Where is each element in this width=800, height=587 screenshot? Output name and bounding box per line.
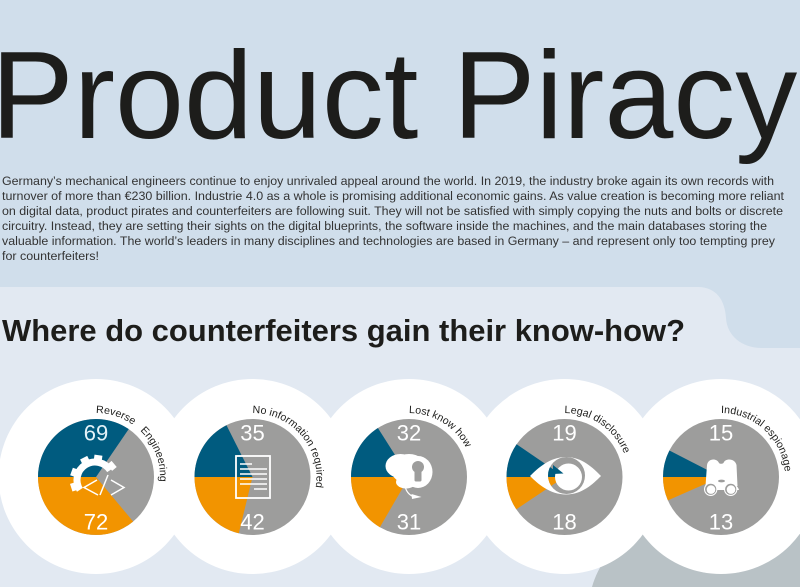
pie: industrial espionage: 15 xyxy=(709,420,733,446)
intro text: for counterfeiters! xyxy=(2,249,99,263)
pie: lost know how xyxy=(351,406,471,535)
intro text: Germany’s mechanical engineers continue to enjoy unrivaled appeal around the world. In 2019, the industry broke again its own records with xyxy=(2,174,774,188)
icon: eye xyxy=(530,457,601,494)
icon: binoculars xyxy=(704,459,739,496)
intro text: valuable information. The world’s leaders in many disciplines and technologies are based in Germany – and represent only too tempting prey xyxy=(2,234,776,248)
pie: reverse engineering: 69 xyxy=(84,420,108,446)
pie: legal disclosure: 18 xyxy=(552,510,577,534)
pie: no information required: 35 xyxy=(240,420,265,446)
intro text: turnover of more than €230 billion. Industrie 4.0 as a whole is promising additional economic gains. As value creation is becoming more reliant xyxy=(2,189,785,203)
white circles xyxy=(0,379,800,574)
intro text: on digital data, product pirates and counterfeiters are following suit. They will not be satisfied with simply copying the nuts and bolts or discrete xyxy=(2,204,783,218)
pie: legal disclosure: 19 xyxy=(552,420,577,446)
lower panel xyxy=(0,287,800,587)
pie: industrial espionage: Industrial espionage xyxy=(722,406,790,471)
pie: no information required: 42 xyxy=(240,510,265,534)
section heading: Where do counterfeiters gain their know-how? xyxy=(2,313,685,348)
pie: reverse engineering xyxy=(38,406,168,535)
intro text: circuitry. Instead, they are setting their sights on the digital blueprints, the software inside the machines, and the main databases storing the xyxy=(2,219,767,233)
pie: reverse engineering: Reverse Engineering xyxy=(96,406,168,482)
grey corner shape xyxy=(592,524,800,587)
pie: lost know how: Lost know how xyxy=(410,406,471,446)
pie: no information required xyxy=(194,406,324,535)
icon: brain with keyhole xyxy=(386,454,432,499)
pie: industrial espionage: 13 xyxy=(709,510,733,534)
pie: no information required: No information required xyxy=(253,406,324,488)
pie: legal disclosure: Legal disclosure xyxy=(565,406,629,453)
icon: gear with code xyxy=(70,455,124,495)
icon: document xyxy=(236,456,270,498)
pie: industrial espionage xyxy=(663,406,790,535)
pie: lost know how: 32 xyxy=(397,420,421,446)
intro text xyxy=(2,174,785,263)
pie: lost know how: 31 xyxy=(397,510,421,534)
title: Product Piracy xyxy=(0,27,797,165)
pie: reverse engineering: 72 xyxy=(84,510,108,534)
pie: legal disclosure xyxy=(506,406,629,535)
